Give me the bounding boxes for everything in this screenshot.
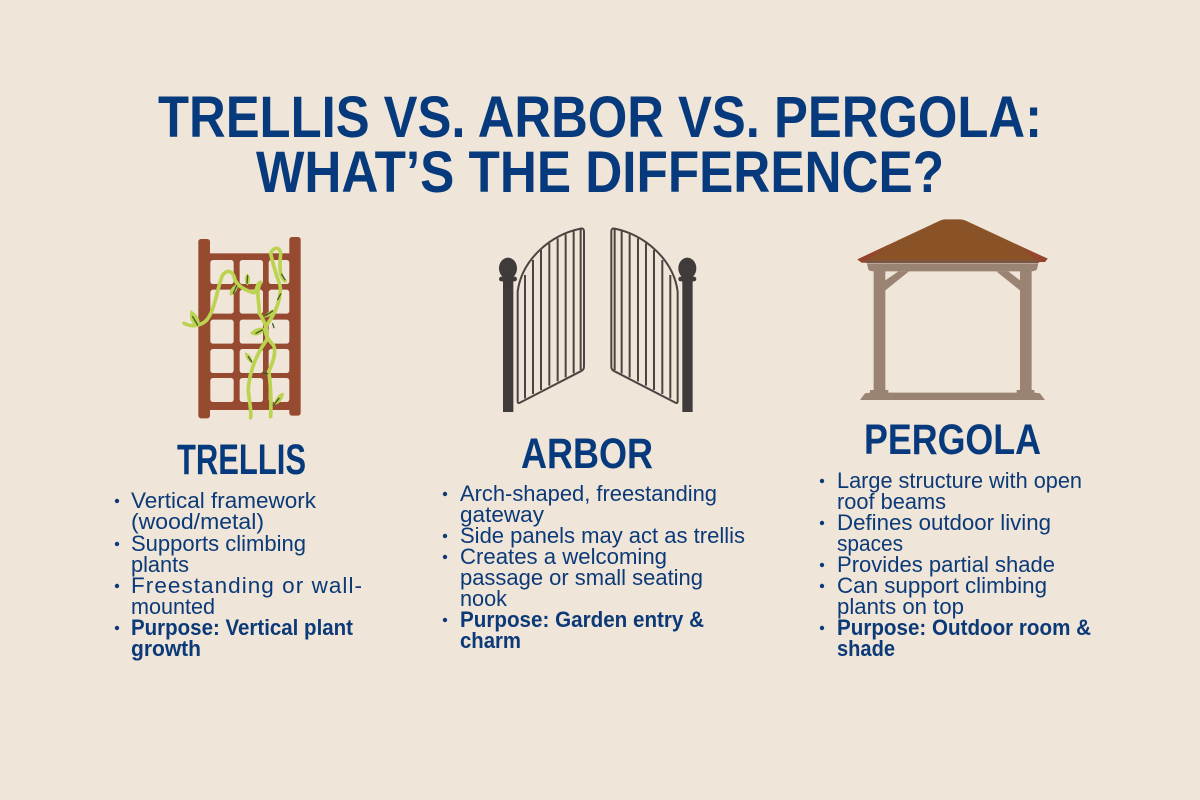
list: pergola points: Provides partial shade xyxy=(837,552,1055,577)
list: pergola points: spaces xyxy=(837,531,903,556)
list: pergola points: Large structure with open xyxy=(837,468,1082,493)
list: trellis points: plants xyxy=(131,552,189,577)
panel: pergola xyxy=(820,219,1091,661)
list: arbor points: nook xyxy=(460,586,508,611)
list: pergola points: Can support climbing xyxy=(837,573,1047,598)
heading: trellis: TRELLIS xyxy=(177,436,306,484)
list: arbor points: gateway xyxy=(460,502,545,527)
list: pergola points: Defines outdoor living xyxy=(837,510,1051,535)
title xyxy=(158,85,1042,205)
icon: trellis with climbing vine xyxy=(184,237,301,418)
panel: arbor xyxy=(443,229,745,653)
list: trellis points: growth xyxy=(131,636,201,661)
list: trellis points: Supports climbing xyxy=(131,531,306,556)
heading: arbor: ARBOR xyxy=(521,430,653,478)
list: trellis points: Freestanding or wall- xyxy=(131,573,362,598)
list: trellis points xyxy=(115,488,362,661)
list: trellis points: Purpose: Vertical plant xyxy=(131,615,354,640)
list: trellis points: mounted xyxy=(131,594,215,619)
list: arbor points: passage or small seating xyxy=(460,565,703,590)
list: arbor points: Creates a welcoming xyxy=(460,544,667,569)
list: pergola points: shade xyxy=(837,636,895,661)
list: arbor points: Side panels may act as trellis xyxy=(460,523,745,548)
list: pergola points: plants on top xyxy=(837,594,964,619)
list: arbor points: Arch-shaped, freestanding xyxy=(460,481,717,506)
list: pergola points xyxy=(820,468,1091,661)
list: arbor points: charm xyxy=(460,628,521,653)
list: arbor points xyxy=(443,481,745,653)
list: arbor points: Purpose: Garden entry & xyxy=(460,607,704,632)
panel: trellis xyxy=(115,237,362,661)
heading: pergola: PERGOLA xyxy=(864,416,1041,464)
list: pergola points: roof beams xyxy=(837,489,946,514)
list: trellis points: (wood/metal) xyxy=(131,509,264,534)
list: pergola points: Purpose: Outdoor room & xyxy=(837,615,1091,640)
title: WHAT’S THE DIFFERENCE? xyxy=(256,140,944,205)
icon: pergola xyxy=(857,219,1048,400)
title: TRELLIS VS. ARBOR VS. PERGOLA: xyxy=(158,85,1042,150)
icon: arched garden gate xyxy=(499,229,696,412)
list: trellis points: Vertical framework xyxy=(131,488,317,513)
